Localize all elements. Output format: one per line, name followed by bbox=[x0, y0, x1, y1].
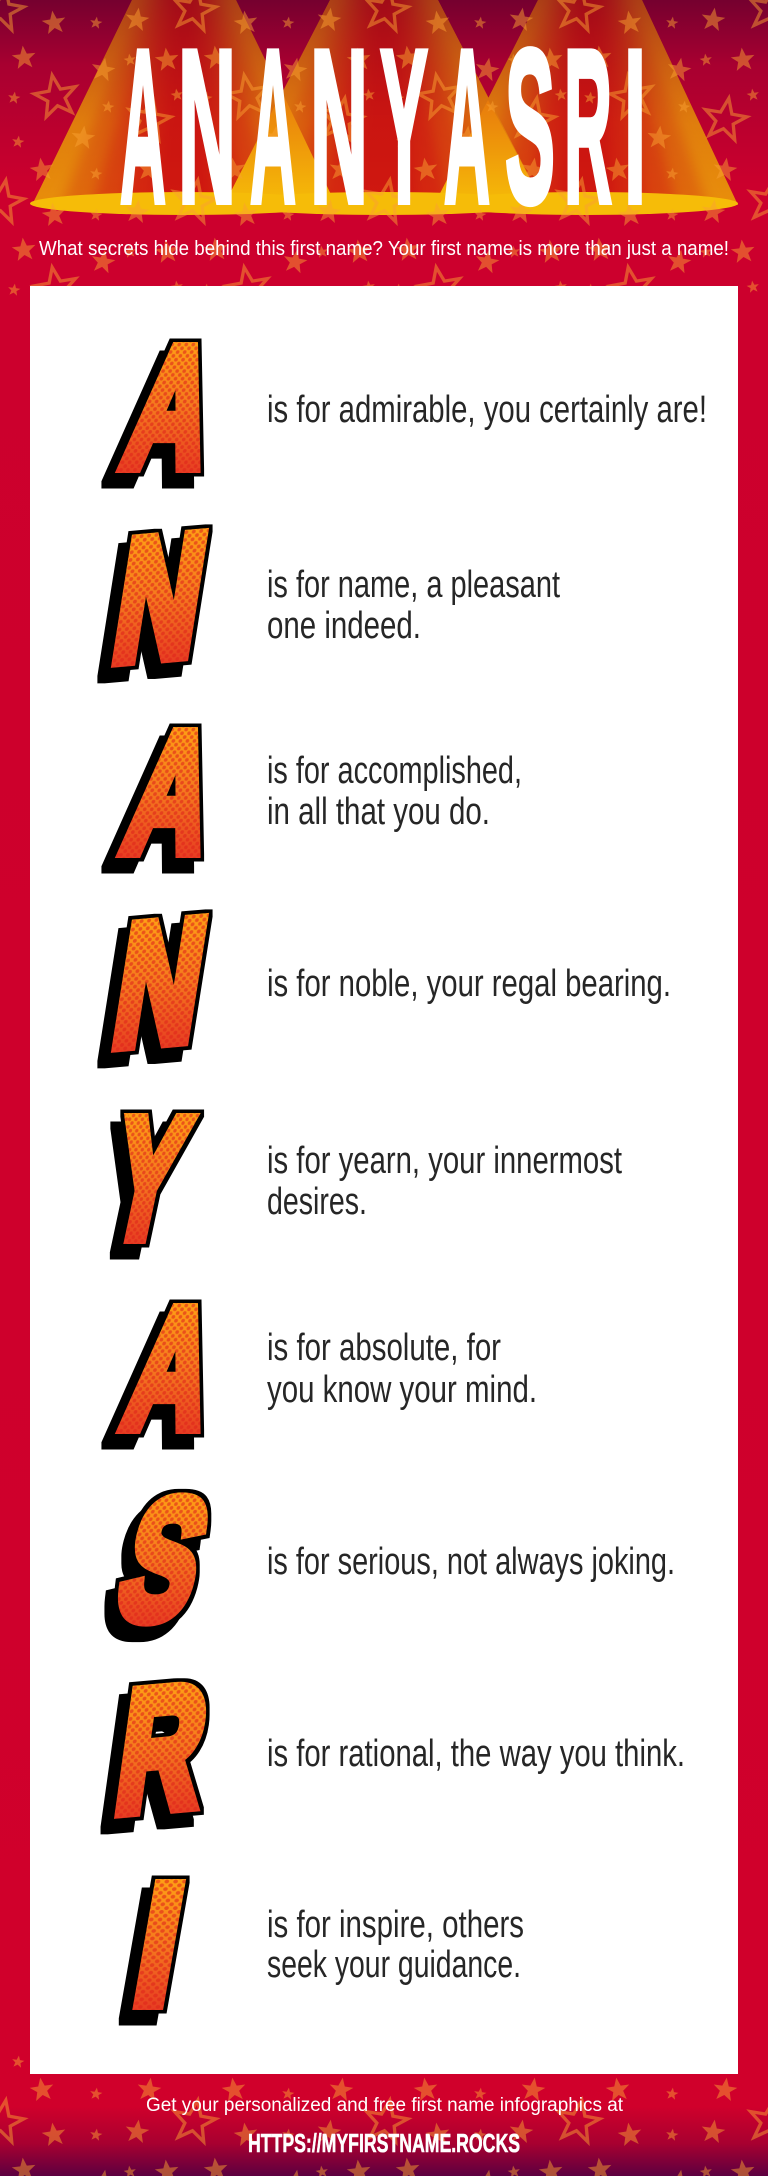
title: S bbox=[505, 5, 555, 249]
text: name: is for name, a pleasant bbox=[267, 564, 560, 606]
letter A row bbox=[112, 312, 707, 502]
letter A row: in all that you do. bbox=[267, 791, 490, 833]
icon: comic letter I: I bbox=[124, 1849, 195, 2039]
text: inspire: is for inspire, others bbox=[267, 1904, 524, 1946]
letter A row bbox=[112, 1273, 537, 1463]
text: accomplished: is for accomplished, bbox=[267, 750, 522, 792]
spotlights bbox=[0, 0, 768, 215]
footer note: Get your personalized and free first name infographics at bbox=[146, 2095, 624, 2116]
letter N row: one indeed. bbox=[267, 605, 421, 647]
title: A bbox=[120, 5, 166, 249]
letter I row: seek your guidance. bbox=[267, 1944, 521, 1986]
title: R bbox=[564, 5, 612, 249]
footer url: HTTPS://MYFIRSTNAME.ROCKS bbox=[248, 2128, 520, 2158]
icon: comic letter A: A bbox=[112, 697, 231, 887]
letter N row bbox=[103, 499, 560, 698]
letter A row: you know your mind. bbox=[267, 1369, 537, 1411]
icon: comic letter S: S bbox=[102, 1466, 225, 1655]
letter Y row: desires. bbox=[267, 1181, 367, 1223]
letter I row bbox=[124, 1849, 524, 2039]
icon: comic letter N: N bbox=[103, 884, 217, 1083]
text: yearn: is for yearn, your innermost bbox=[267, 1140, 622, 1182]
letter S row bbox=[102, 1466, 675, 1655]
title: A bbox=[250, 5, 296, 249]
title: Y bbox=[380, 5, 428, 249]
icon: comic letter Y: Y bbox=[95, 1083, 201, 1273]
infographic: I bbox=[624, 5, 646, 249]
icon: comic letter R: R bbox=[107, 1649, 217, 1849]
icon: comic letter N: N bbox=[103, 499, 217, 698]
subtitle: What secrets hide behind this first name? Your first name is more than just a name! bbox=[39, 238, 729, 260]
title: N bbox=[178, 5, 236, 249]
icon: comic letter A: A bbox=[112, 1273, 231, 1463]
letter N row bbox=[103, 884, 671, 1083]
icon: comic letter A: A bbox=[112, 312, 231, 502]
panel: letters bbox=[30, 286, 738, 2074]
letter Y row bbox=[95, 1083, 622, 1273]
letter R row bbox=[107, 1649, 685, 1849]
title: A bbox=[444, 5, 490, 249]
title: N bbox=[310, 5, 368, 249]
letter A row bbox=[112, 697, 522, 887]
text: absolute: is for absolute, for bbox=[267, 1327, 501, 1369]
